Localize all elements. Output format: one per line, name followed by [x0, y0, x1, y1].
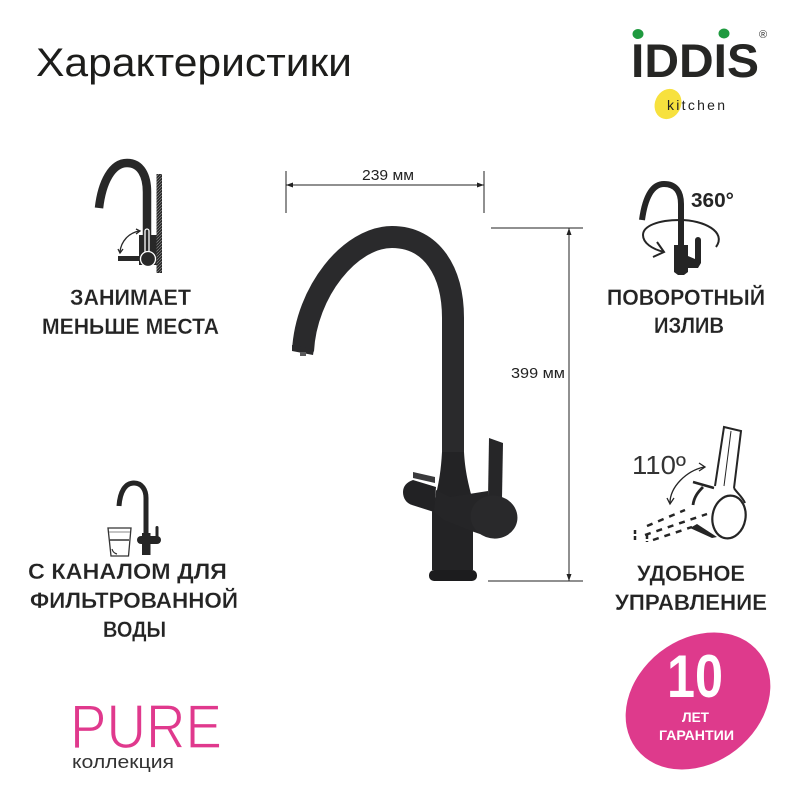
label: swivel spout: ИЗЛИВ: [654, 313, 724, 338]
logo: iddis kitchen: kitchen: [667, 97, 725, 113]
dimension: height 399 mm: [488, 228, 583, 581]
badge: 10 year warranty: ГАРАНТИИ: [659, 727, 734, 743]
collection name: коллекция: [72, 751, 174, 772]
dimension: width 239 mm: 239 мм: [362, 168, 414, 184]
title: Характеристики: [36, 41, 352, 85]
label: filtered water channel: [28, 559, 238, 642]
label: easy control: УПРАВЛЕНИЕ: [615, 590, 767, 615]
badge: 10 year warranty: ЛЕТ: [682, 709, 709, 725]
logo: iddis kitchen: [631, 28, 767, 124]
label: easy control: УДОБНОЕ: [637, 561, 745, 586]
badge: 10 year warranty: [598, 604, 798, 798]
icon: space-saving faucet: [99, 163, 162, 273]
label: filtered water channel: ФИЛЬТРОВАННОЙ: [30, 588, 238, 613]
icon: lever 110 degrees: 110º: [632, 450, 687, 480]
main faucet: [292, 237, 521, 581]
icon: swivel spout 360: 360°: [691, 190, 734, 212]
icon: lever 110 degrees: [632, 427, 749, 542]
label: filtered water channel: С КАНАЛОМ ДЛЯ: [28, 559, 227, 584]
label: swivel spout: ПОВОРОТНЫЙ: [607, 285, 765, 310]
icon: swivel spout 360: [642, 184, 734, 275]
collection name: PURE: [70, 693, 222, 762]
label: takes less space: [42, 285, 219, 339]
dimension: height 399 mm: 399 мм: [511, 366, 565, 382]
badge: 10 year warranty: 10: [667, 643, 723, 710]
dimension: width 239 mm: [286, 168, 484, 213]
logo: iddis kitchen: ®: [759, 29, 767, 41]
label: takes less space: ЗАНИМАЕТ: [70, 285, 192, 310]
label: takes less space: МЕНЬШЕ МЕСТА: [42, 314, 219, 339]
label: filtered water channel: ВОДЫ: [103, 617, 166, 642]
label: swivel spout: [607, 285, 765, 338]
icon: filtered water faucet with glass: [108, 483, 161, 556]
label: easy control: [615, 561, 767, 615]
logo: iddis kitchen: IDDIS: [631, 34, 759, 87]
